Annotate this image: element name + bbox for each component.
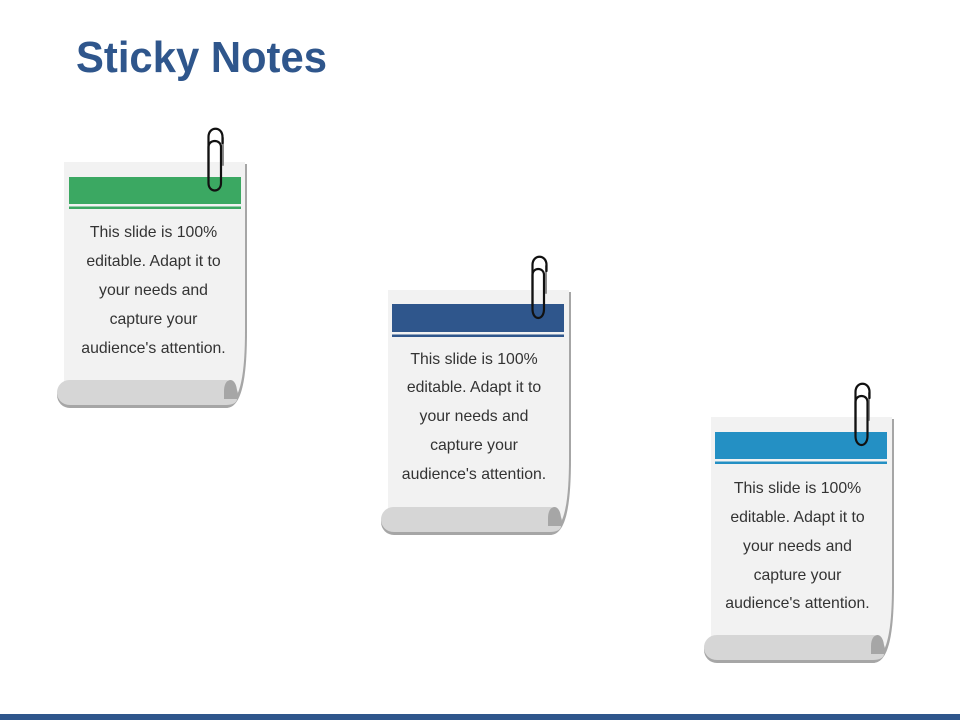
panel: green sticky note	[57, 129, 247, 408]
panel: blue sticky note	[381, 257, 571, 535]
note text	[725, 480, 870, 612]
paper roll	[57, 380, 238, 408]
note text: editable. Adapt it to	[407, 379, 541, 396]
note text: This slide is 100%	[90, 224, 217, 241]
note text	[81, 224, 226, 357]
note text: audience's attention.	[725, 595, 870, 612]
paper sheet	[711, 417, 894, 663]
note text: capture your	[110, 311, 197, 328]
note text: capture your	[754, 567, 841, 584]
title: Sticky Notes	[76, 33, 327, 82]
note text: This slide is 100%	[410, 351, 538, 368]
note text: editable. Adapt it to	[86, 253, 221, 270]
paper roll	[381, 507, 562, 535]
note text: audience's attention.	[402, 466, 546, 483]
note text: your needs and	[420, 408, 528, 425]
icon: paperclip	[208, 129, 223, 190]
note text: editable. Adapt it to	[730, 509, 865, 526]
paper sheet	[64, 162, 247, 408]
note text: capture your	[430, 437, 518, 454]
icon: paperclip	[856, 384, 870, 445]
header bar	[715, 432, 887, 459]
header rule	[715, 462, 887, 464]
paper roll	[704, 635, 885, 663]
note text: This slide is 100%	[734, 480, 861, 497]
paper sheet	[388, 290, 571, 535]
header bar	[392, 304, 564, 332]
note text: your needs and	[99, 282, 208, 299]
note text: your needs and	[743, 538, 852, 555]
note text	[402, 351, 546, 483]
header bar	[69, 177, 241, 204]
icon: paperclip	[532, 257, 546, 318]
note text: audience's attention.	[81, 340, 226, 357]
panel: teal sticky note	[704, 384, 894, 663]
header rule	[392, 334, 564, 337]
header rule	[69, 206, 241, 209]
footer bar	[0, 714, 960, 720]
